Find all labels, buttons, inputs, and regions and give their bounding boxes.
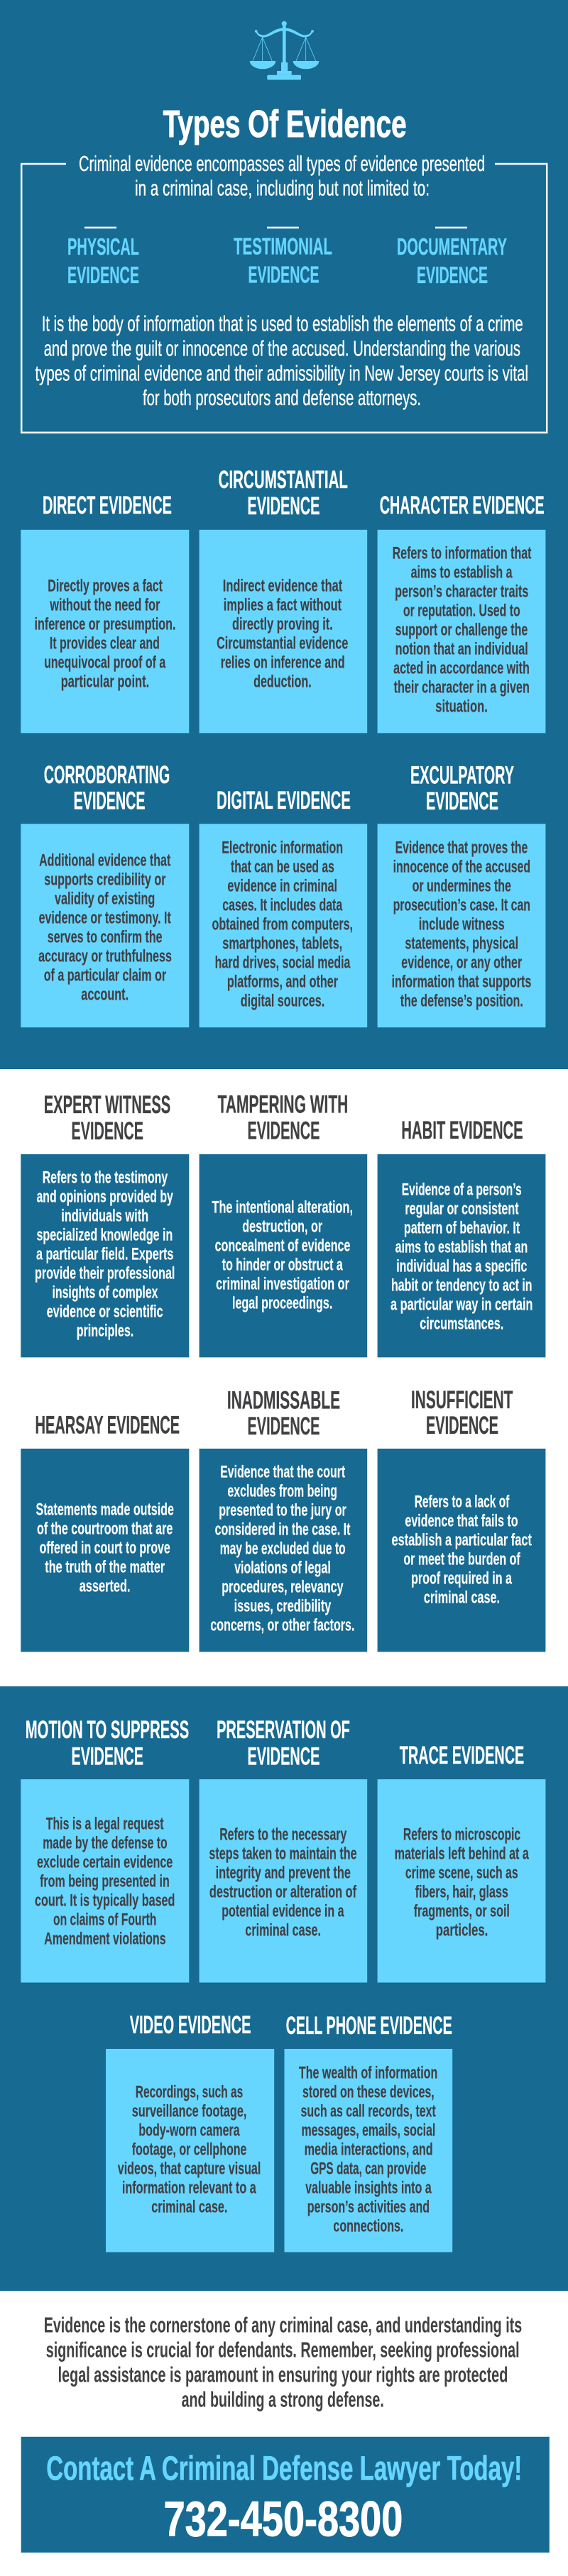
card: corroborating evidence: validity of existing bbox=[55, 890, 155, 908]
card: insufficient evidence: proof required in a bbox=[411, 1569, 512, 1588]
card: preservation of evidence bbox=[200, 1715, 367, 1982]
card: preservation of evidence: destruction or alteration of bbox=[209, 1883, 357, 1901]
card: circumstantial evidence: CIRCUMSTANTIAL bbox=[219, 465, 348, 494]
card: cell phone evidence: such as call records, text bbox=[301, 2101, 436, 2121]
card: cell phone evidence: messages, emails, social bbox=[301, 2121, 435, 2140]
card: video evidence: Recordings, such as bbox=[136, 2083, 243, 2101]
card: motion to suppress evidence: This is a legal request bbox=[46, 1815, 164, 1833]
card: corroborating evidence: supports credibility or bbox=[44, 870, 166, 890]
card: hearsay evidence: asserted. bbox=[80, 1576, 131, 1596]
card: cell phone evidence: person’s activities and bbox=[307, 2198, 430, 2216]
card: motion to suppress evidence: on claims of Fourth bbox=[53, 1910, 156, 1930]
card: digital evidence: DIGITAL EVIDENCE bbox=[217, 786, 351, 814]
card: insufficient evidence: Refers to a lack of bbox=[415, 1493, 510, 1511]
card: direct evidence: inference or presumption. bbox=[34, 614, 176, 634]
body text bbox=[36, 312, 528, 410]
card: trace evidence: fragments, or soil bbox=[414, 1901, 510, 1921]
card: direct evidence: unequivocal proof of a bbox=[44, 653, 166, 673]
card: tampering with evidence: The intentional alteration, bbox=[212, 1198, 353, 1217]
card: expert witness evidence: EXPERT WITNESS bbox=[44, 1090, 170, 1119]
card: digital evidence: Electronic information bbox=[222, 839, 343, 857]
panel: intro section bbox=[0, 0, 568, 1069]
card: motion to suppress evidence: exclude certain evidence bbox=[37, 1853, 173, 1872]
card: digital evidence: obtained from computers, bbox=[212, 915, 353, 934]
card: insufficient evidence: EVIDENCE bbox=[426, 1411, 498, 1439]
card: circumstantial evidence: implies a fact without bbox=[224, 596, 342, 614]
card: motion to suppress evidence: Amendment violations bbox=[44, 1930, 166, 1948]
card: preservation of evidence: steps taken to maintain the bbox=[209, 1845, 357, 1863]
card: habit evidence bbox=[378, 1116, 545, 1357]
card: exculpatory evidence bbox=[378, 761, 545, 1027]
card: exculpatory evidence: or undermines the bbox=[413, 877, 511, 895]
card: motion to suppress evidence: MOTION TO SUPPRESS bbox=[26, 1715, 189, 1744]
card: inadmissable evidence: considered in the case. It bbox=[215, 1520, 350, 1539]
card: direct evidence: without the need for bbox=[50, 596, 160, 614]
card: direct evidence: particular point. bbox=[61, 673, 149, 691]
card: preservation of evidence: EVIDENCE bbox=[247, 1742, 320, 1770]
card: preservation of evidence: potential evidence in a bbox=[222, 1901, 344, 1921]
card: cell phone evidence: The wealth of information bbox=[299, 2063, 437, 2083]
card: insufficient evidence bbox=[378, 1386, 545, 1652]
card: trace evidence: particles. bbox=[436, 1921, 488, 1940]
card: tampering with evidence: destruction, or bbox=[242, 1217, 322, 1236]
card: video evidence: surveillance footage, bbox=[132, 2101, 246, 2121]
item: testimonial evidence: TESTIMONIAL bbox=[234, 233, 332, 260]
card: video evidence: videos, that capture visual bbox=[118, 2160, 261, 2178]
card: tampering with evidence: to hinder or obstruct a bbox=[222, 1256, 343, 1274]
card: circumstantial evidence: relies on inference and bbox=[221, 653, 345, 673]
card: inadmissable evidence: may be excluded due to bbox=[220, 1539, 346, 1558]
item: physical evidence: EVIDENCE bbox=[67, 262, 139, 289]
card: expert witness evidence bbox=[21, 1090, 189, 1357]
card: direct evidence: It provides clear and bbox=[50, 634, 160, 653]
card: habit evidence: circumstances. bbox=[420, 1314, 503, 1334]
card: preservation of evidence: PRESERVATION OF bbox=[217, 1715, 350, 1744]
card: corroborating evidence: accuracy or truthfulness bbox=[38, 946, 172, 966]
card: video evidence: footage, or cellphone bbox=[132, 2140, 246, 2160]
card: expert witness evidence: and opinions provided by bbox=[37, 1188, 173, 1206]
card: circumstantial evidence: Indirect evidence that bbox=[223, 576, 342, 596]
card: tampering with evidence: criminal investigation or bbox=[216, 1274, 349, 1294]
card: hearsay evidence bbox=[21, 1411, 189, 1652]
card: cell phone evidence: connections. bbox=[333, 2216, 403, 2236]
card: inadmissable evidence: violations of legal bbox=[234, 1558, 331, 1578]
card: cell phone evidence bbox=[284, 2011, 452, 2252]
card: expert witness evidence: individuals with bbox=[61, 1206, 148, 1226]
card: inadmissable evidence: EVIDENCE bbox=[247, 1412, 320, 1440]
card: expert witness evidence: EVIDENCE bbox=[71, 1117, 143, 1145]
card: corroborating evidence: Additional evidence that bbox=[39, 851, 170, 870]
card: digital evidence: hard drives, social media bbox=[215, 953, 351, 972]
card: inadmissable evidence: INADMISSABLE bbox=[227, 1386, 340, 1415]
item: testimonial evidence bbox=[234, 227, 332, 288]
icon: scales of justice bbox=[250, 21, 319, 80]
card: digital evidence: cases. It includes data bbox=[222, 895, 343, 915]
card: video evidence: criminal case. bbox=[151, 2198, 227, 2216]
card: inadmissable evidence: concerns, or other factors. bbox=[210, 1616, 354, 1635]
card: cell phone evidence: media interactions, and bbox=[305, 2140, 433, 2160]
panel: lower blue section bbox=[0, 1686, 568, 2291]
title: Types Of Evidence bbox=[163, 103, 407, 145]
card: direct evidence: Directly proves a fact bbox=[48, 576, 163, 596]
card: trace evidence: fibers, hair, glass bbox=[415, 1883, 508, 1901]
card: inadmissable evidence bbox=[200, 1386, 367, 1652]
card: video evidence bbox=[106, 2011, 274, 2252]
card: expert witness evidence: insights of complex bbox=[53, 1283, 158, 1303]
card: inadmissable evidence: procedures, relevancy bbox=[222, 1578, 344, 1596]
card: inadmissable evidence: presented to the jury or bbox=[219, 1501, 346, 1520]
card: inadmissable evidence: Evidence that the court bbox=[220, 1463, 345, 1481]
item: documentary evidence bbox=[397, 227, 507, 289]
phone number: 732-450-8300 bbox=[164, 2492, 403, 2547]
card: preservation of evidence: criminal case. bbox=[245, 1921, 321, 1940]
card: corroborating evidence bbox=[21, 761, 189, 1027]
card: hearsay evidence: offered in court to prove bbox=[40, 1538, 170, 1558]
card: digital evidence: smartphones, tablets, bbox=[222, 934, 342, 953]
card: digital evidence bbox=[200, 786, 367, 1027]
card: tampering with evidence: legal proceedings. bbox=[232, 1294, 332, 1312]
card: digital evidence: platforms, and other bbox=[227, 972, 338, 992]
card: video evidence: body-worn camera bbox=[138, 2121, 240, 2140]
card: expert witness evidence: specialized knowledge in bbox=[37, 1226, 173, 1244]
card: hearsay evidence: of the courtroom that are bbox=[37, 1520, 173, 1538]
card: trace evidence bbox=[378, 1741, 545, 1982]
card: digital evidence: evidence in criminal bbox=[227, 877, 337, 895]
card: hearsay evidence: HEARSAY EVIDENCE bbox=[36, 1411, 180, 1439]
card: motion to suppress evidence: made by the defense to bbox=[43, 1833, 168, 1853]
card: motion to suppress evidence: from being presented in bbox=[40, 1872, 170, 1891]
card: cell phone evidence: stored on these devices, bbox=[302, 2083, 435, 2101]
frame bbox=[21, 164, 547, 433]
item: physical evidence: PHYSICAL bbox=[67, 234, 139, 260]
card: tampering with evidence: EVIDENCE bbox=[247, 1117, 320, 1145]
item: physical evidence bbox=[67, 227, 139, 289]
card: corroborating evidence: serves to confirm the bbox=[48, 928, 162, 946]
card: corroborating evidence: evidence or testimony. It bbox=[39, 908, 171, 928]
card: video evidence: VIDEO EVIDENCE bbox=[130, 2011, 251, 2039]
card: preservation of evidence: integrity and prevent the bbox=[216, 1863, 351, 1883]
card: exculpatory evidence: statements, physical bbox=[405, 934, 518, 953]
card: hearsay evidence: Statements made outside bbox=[36, 1500, 174, 1520]
card: cell phone evidence: GPS data, can provide bbox=[310, 2160, 426, 2178]
card: motion to suppress evidence: EVIDENCE bbox=[71, 1742, 143, 1770]
card: expert witness evidence: provide their professional bbox=[35, 1264, 175, 1283]
card: character evidence bbox=[378, 491, 545, 733]
card: motion to suppress evidence bbox=[21, 1715, 189, 1982]
card: corroborating evidence: EVIDENCE bbox=[74, 787, 146, 815]
card: character evidence: aims to establish a bbox=[411, 563, 513, 582]
card: digital evidence: digital sources. bbox=[241, 992, 324, 1010]
card: circumstantial evidence: Circumstantial evidence bbox=[217, 634, 348, 653]
card: corroborating evidence: account. bbox=[81, 985, 129, 1005]
card: inadmissable evidence: excludes from being bbox=[227, 1481, 337, 1501]
item: testimonial evidence: EVIDENCE bbox=[248, 262, 320, 288]
card: expert witness evidence: a particular field. Experts bbox=[36, 1244, 173, 1264]
card: expert witness evidence: Refers to the testimony bbox=[43, 1168, 168, 1188]
card: corroborating evidence: of a particular claim or bbox=[44, 966, 166, 985]
item: documentary evidence: EVIDENCE bbox=[417, 262, 488, 289]
card: corroborating evidence: CORROBORATING bbox=[44, 761, 170, 789]
card: cell phone evidence: valuable insights into a bbox=[305, 2178, 432, 2198]
card: motion to suppress evidence: court. It is typically based bbox=[35, 1891, 175, 1910]
card: circumstantial evidence: EVIDENCE bbox=[247, 492, 320, 520]
body text: for both prosecutors and defense attorneys. bbox=[143, 386, 421, 410]
card: expert witness evidence: evidence or scientific bbox=[47, 1303, 163, 1321]
card: hearsay evidence: the truth of the matter bbox=[45, 1558, 165, 1576]
card: exculpatory evidence: EVIDENCE bbox=[426, 787, 498, 815]
card: expert witness evidence: principles. bbox=[77, 1321, 133, 1341]
card: character evidence: situation. bbox=[435, 697, 488, 717]
card: circumstantial evidence: deduction. bbox=[253, 673, 312, 691]
intro text bbox=[79, 152, 485, 200]
card: insufficient evidence: criminal case. bbox=[424, 1588, 500, 1608]
card: circumstantial evidence bbox=[200, 465, 367, 733]
card: tampering with evidence: TAMPERING WITH bbox=[218, 1090, 348, 1118]
card: video evidence: information relevant to a bbox=[122, 2178, 256, 2198]
closing text bbox=[44, 2313, 522, 2412]
card: digital evidence: that can be used as bbox=[231, 857, 334, 877]
intro text: in a criminal case, including but not limited to: bbox=[135, 176, 430, 200]
card: tampering with evidence bbox=[200, 1090, 367, 1357]
closing text: and building a strong defense. bbox=[182, 2387, 384, 2412]
card: preservation of evidence: Refers to the necessary bbox=[219, 1825, 347, 1845]
card: direct evidence bbox=[21, 491, 189, 733]
card: exculpatory evidence: include witness bbox=[419, 915, 505, 934]
card: tampering with evidence: concealment of evidence bbox=[215, 1236, 350, 1256]
card: inadmissable evidence: issues, credibility bbox=[234, 1596, 332, 1616]
call to action box bbox=[21, 2437, 550, 2553]
card: direct evidence: DIRECT EVIDENCE bbox=[43, 491, 172, 519]
card: circumstantial evidence: directly proving it. bbox=[232, 614, 333, 634]
